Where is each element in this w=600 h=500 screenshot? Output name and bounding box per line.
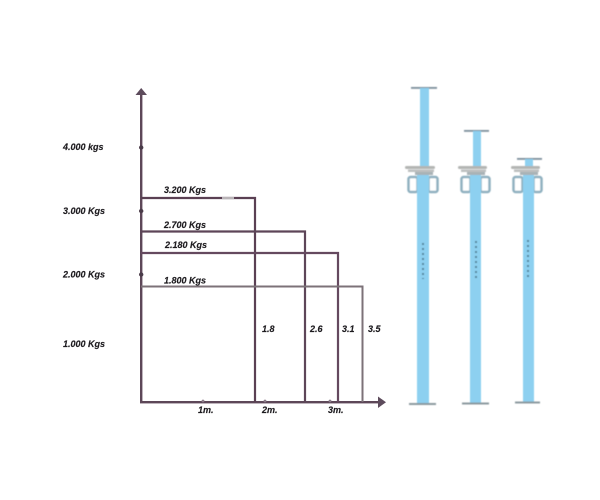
height labels	[262, 324, 382, 334]
y axis labels: 4.000 kgs	[62, 142, 104, 152]
y axis labels	[62, 142, 105, 349]
load labels: 2.180 Kgs	[164, 240, 207, 250]
2.700 Kgs curve line	[141, 232, 305, 402]
prop: tall	[405, 87, 438, 405]
2.180 Kgs curve line	[141, 253, 338, 402]
3.200 Kgs curve line	[141, 197, 255, 402]
y axis labels: 3.000 Kgs	[63, 206, 105, 216]
height labels: 1.8	[262, 324, 275, 334]
height labels: 3.5	[368, 324, 382, 334]
x axis labels: 3m.	[328, 405, 344, 415]
height labels: 2.6	[309, 324, 324, 334]
y axis labels: 2.000 Kgs	[62, 270, 105, 280]
y axis labels: 1.000 Kgs	[63, 339, 105, 349]
load chart	[62, 88, 386, 415]
prop: medium	[458, 130, 490, 404]
height labels: 3.1	[342, 324, 355, 334]
x axis labels: 1m.	[198, 405, 214, 415]
x axis	[140, 396, 386, 408]
x axis labels: 2m.	[261, 405, 278, 415]
load labels: 3.200 Kgs	[164, 185, 206, 195]
1.800 Kgs curve line	[141, 286, 362, 402]
load labels: 1.800 Kgs	[164, 276, 206, 286]
x axis labels	[198, 405, 344, 415]
y axis	[136, 88, 147, 403]
load labels	[163, 185, 207, 286]
prop: short	[511, 158, 542, 404]
load labels: 2.700 Kgs	[163, 220, 206, 230]
